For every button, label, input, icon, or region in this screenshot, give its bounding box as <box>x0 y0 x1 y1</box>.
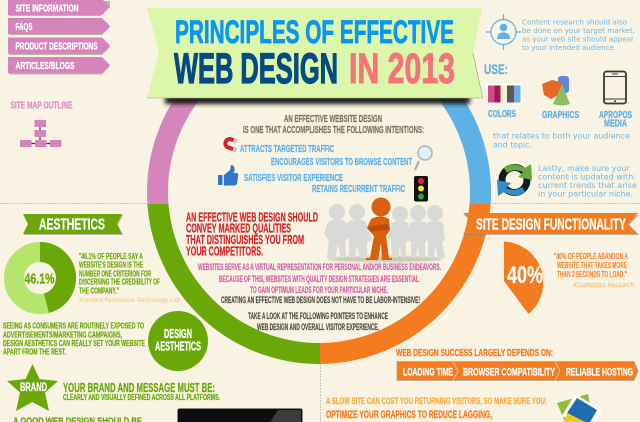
intro text <box>243 114 424 136</box>
use heading: USE: <box>484 61 508 77</box>
intentions list: SATISFIES VISITOR EXPERIENCE <box>244 172 343 184</box>
pie slice 40% <box>504 242 543 314</box>
target audience text: as your web site should appeal <box>522 34 633 44</box>
aesthetics banner <box>23 214 123 235</box>
central ring <box>147 98 491 364</box>
label: apropos media: MEDIA <box>604 118 627 130</box>
target audience text: Content research should also <box>522 18 627 26</box>
intentions list: RETAINS RECURRENT TRAFFIC <box>312 183 405 195</box>
icon: tablet <box>604 72 626 104</box>
label: graphics: GRAPHICS <box>542 109 579 121</box>
update text <box>538 164 637 198</box>
label: colors: COLORS <box>488 108 516 120</box>
illustration: people <box>324 198 445 262</box>
tab: product descriptions: PRODUCT DESCRIPTIONS <box>16 40 98 52</box>
aesthetics paragraph: DESIGN AESTHETICS CAN REALLY SET YOUR WEBSITE <box>3 338 145 348</box>
dark paragraph: WEB DESIGN AND OVERALL VISITOR EXPERIENCE. <box>257 322 379 332</box>
icon: traffic light <box>414 176 428 202</box>
red statement: CONVEY MARKED QUALITIES <box>186 221 291 236</box>
aesthetics quote: WEBSITE'S DESIGN IS THE <box>79 261 143 270</box>
icon: photos stack <box>557 394 602 422</box>
icon: color swatches <box>486 83 522 105</box>
gray figures <box>324 204 445 258</box>
design aesthetics circle <box>148 311 208 371</box>
label: apropos media <box>599 109 632 130</box>
target audience text: to your intended audience. <box>522 43 616 52</box>
red statement <box>186 209 318 258</box>
orange figure <box>366 198 392 260</box>
update text: in your particular niche. <box>538 190 633 198</box>
quote source: Stanford Persuasive Technology Lab <box>79 296 180 304</box>
functionality quote <box>554 252 628 279</box>
title year: IN 2013 <box>349 45 455 93</box>
success factors bar: BROWSER COMPATIBILITY <box>463 366 555 378</box>
dark paragraph <box>221 295 420 332</box>
tab: articles/blogs: ARTICLES/BLOGS <box>16 60 74 72</box>
aesthetics quote: THE COMPANY." <box>79 286 119 295</box>
tab: site information: SITE INFORMATION <box>16 2 78 14</box>
aesthetics quote: "46.1% OF PEOPLE SAY A <box>79 252 143 261</box>
aesthetics paragraph: APART FROM THE REST. <box>3 346 66 356</box>
icon: site map <box>20 120 62 147</box>
navigation tabs <box>8 0 110 74</box>
relates text: and topic. <box>493 140 532 150</box>
success factors bar: LOADING TIME <box>403 366 453 378</box>
icon: thumbs up <box>218 165 238 186</box>
dark paragraph: TAKE A LOOK AT THE FOLLOWING POINTERS TO ENHANCE <box>248 311 388 321</box>
relates text <box>493 132 630 150</box>
red statement: THAT DISTINGUISHES YOU FROM <box>186 232 304 247</box>
success heading: WEB DESIGN SUCCESS LARGELY DEPENDS ON: <box>396 347 553 359</box>
intro text: IS ONE THAT ACCOMPLISHES THE FOLLOWING INTENTIONS: <box>243 125 424 136</box>
pink paragraph: TO GAIN OPTIMUM LEADS FOR YOUR PARTICULAR NICHE. <box>250 285 388 295</box>
site map outline heading: SITE MAP OUTLINE <box>10 100 73 112</box>
target audience icon <box>486 14 521 50</box>
aesthetics quote: DISCERNING THE CREDIBILITY OF <box>79 278 160 287</box>
pink paragraph: WEBSITES SERVE AS A VIRTUAL REPRESENTATION FOR PERSONAL AND/OR BUSINESS ENDEAVORS. <box>198 262 441 272</box>
intro text: AN EFFECTIVE WEBSITE DESIGN <box>284 114 382 125</box>
brand star: BRAND <box>20 380 47 394</box>
red statement: YOUR COMPETITORS. <box>186 243 263 258</box>
title line 2: WEB DESIGN <box>174 45 338 93</box>
update text: Lastly, make sure your <box>538 164 631 173</box>
update text: current trends that arise <box>538 181 637 190</box>
title line 1: PRINCIPLES OF EFFECTIVE <box>175 14 454 50</box>
target audience text <box>522 18 635 52</box>
design aesthetics circle: DESIGN <box>164 326 192 341</box>
title banner <box>147 8 482 104</box>
device image <box>178 408 302 422</box>
brand text: YOUR BRAND AND MESSAGE MUST BE: <box>63 381 215 395</box>
aesthetics quote: NUMBER ONE CRITERION FOR <box>79 269 151 278</box>
brand text <box>63 381 220 402</box>
pink paragraph <box>198 262 441 295</box>
aesthetics quote <box>79 252 160 295</box>
icon: magnifier <box>415 146 432 170</box>
aesthetics banner: AESTHETICS <box>39 216 105 234</box>
update text: content is updated with: <box>538 172 636 182</box>
intentions list: ENCOURAGES VISITORS TO BROWSE CONTENT <box>271 156 412 168</box>
intentions list: ATTRACTS TARGETED TRAFFIC <box>240 143 334 155</box>
target audience text: be done on your target market, <box>522 26 635 35</box>
icon: graphics shapes <box>542 76 570 106</box>
icon: magnet <box>225 139 237 150</box>
design aesthetics circle: AESTHETICS <box>155 338 201 354</box>
aesthetics paragraph: ADVERTISEMENTS/MARKETING CAMPAIGNS, <box>3 329 122 339</box>
red statement: AN EFFECTIVE WEB DESIGN SHOULD <box>186 209 318 224</box>
intentions list <box>240 143 412 195</box>
dark paragraph: CREATING AN EFFECTIVE WEB DESIGN DOES NOT HAVE TO BE LABOR-INTENSIVE! <box>221 295 420 305</box>
icon: update arrows <box>497 164 532 196</box>
success factors bar <box>397 362 638 380</box>
brand star <box>7 364 58 411</box>
tab: faqs: FAQS <box>16 21 32 33</box>
donut chart 46.1%: 46.1% <box>24 270 54 288</box>
donut chart 46.1% <box>14 242 76 313</box>
optimize text: OPTIMIZE YOUR GRAPHICS TO REDUCE LAGGING, <box>326 409 492 421</box>
pink paragraph: BECAUSE OF THIS, WEBSITES WITH QUALITY DESIGN STRATEGIES ARE ESSENTIAL <box>219 274 419 284</box>
brand text: CLEARLY AND VISUALLY DEFINED ACROSS ALL PLATFORMS. <box>63 393 220 402</box>
relates text: that relates to both your audience <box>493 132 630 140</box>
aesthetics paragraph: SEEING AS CONSUMERS ARE ROUTINELY EXPOSED TO <box>3 321 144 331</box>
aesthetics paragraph <box>3 321 145 356</box>
pie slice 40%: 40% <box>507 262 543 289</box>
